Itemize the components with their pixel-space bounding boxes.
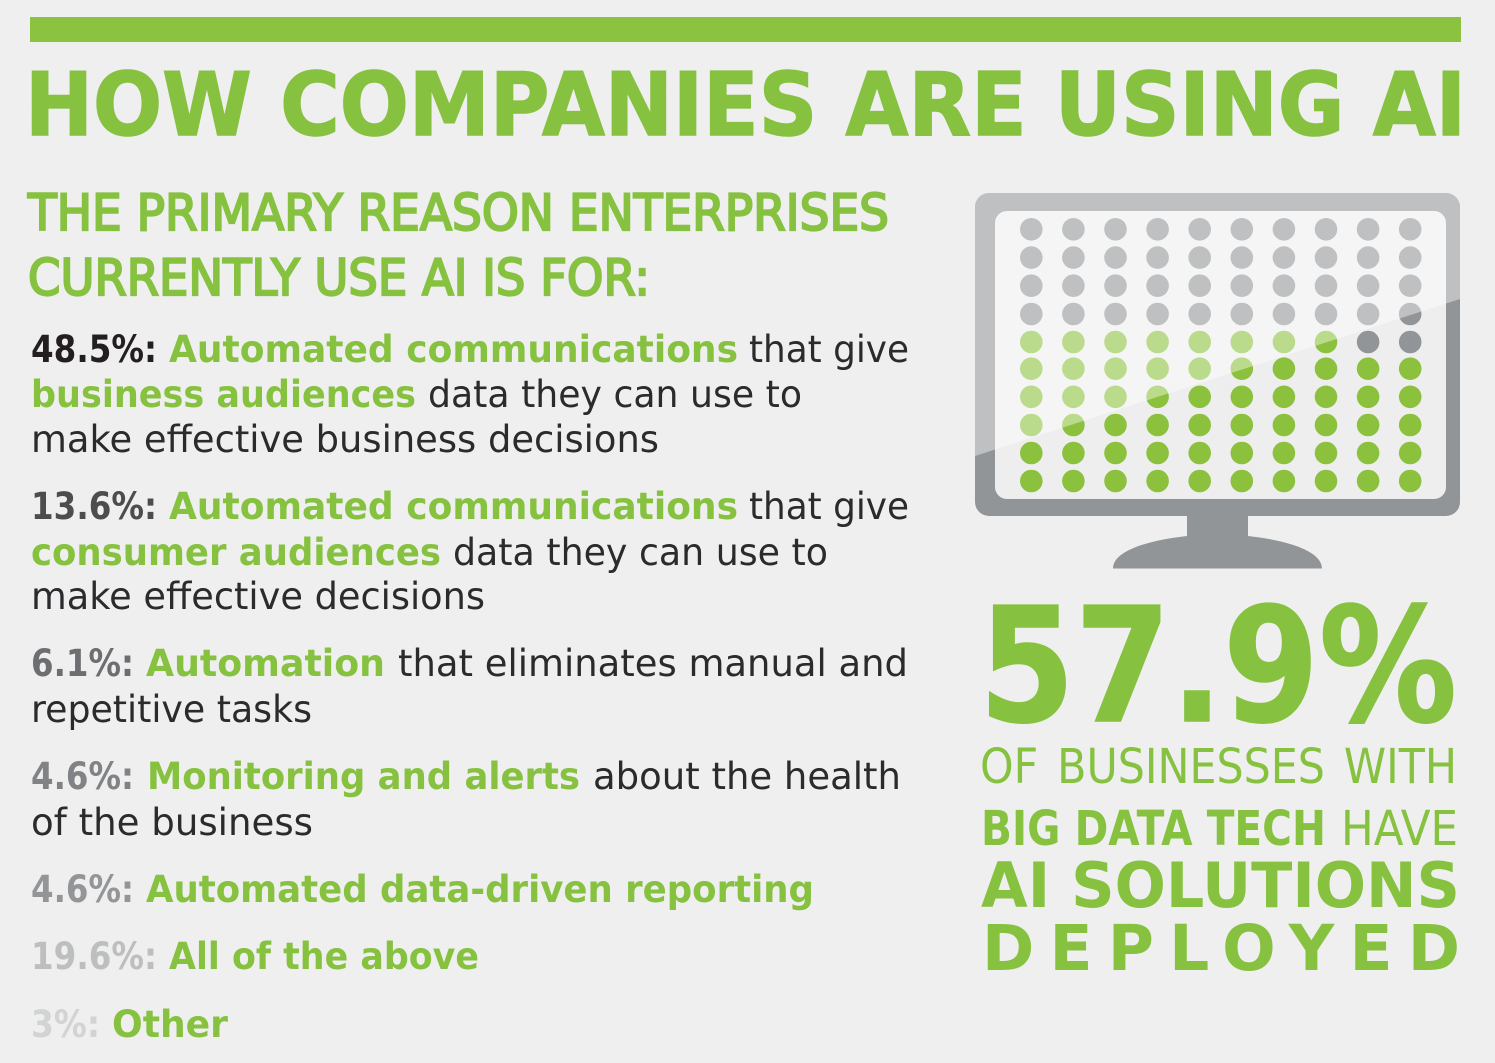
item: 4.6% reporting: Automated data-driven reporting: [146, 867, 814, 911]
item: 19.6%: 19.6%:: [31, 934, 157, 978]
item: 4.6% monitoring: about the health: [593, 754, 901, 798]
dot grid: 57.9%: [1020, 218, 1421, 492]
item: 3%: 3%:: [31, 1002, 100, 1046]
item: 4.6% monitoring: of the business: [31, 800, 313, 844]
monitor frame: [975, 193, 1460, 516]
item: 48.5%: make effective business decisions: [31, 417, 659, 461]
item: 48.5%: Automated communications: [169, 327, 738, 371]
item: 48.5%: data they can use to: [428, 372, 802, 416]
subheading: [27, 184, 889, 307]
item: 13.6%: that give: [749, 484, 909, 528]
subheading: CURRENTLY USE AI IS FOR:: [28, 249, 650, 307]
item: 3%: Other: [112, 1002, 228, 1046]
monitor stand: [1113, 514, 1322, 568]
stat caption: BIG DATA TECH: [981, 801, 1326, 857]
stat caption: DEPLOYED: [982, 912, 1460, 985]
stat list: [31, 327, 909, 1046]
monitor screen: [995, 211, 1446, 499]
item: 13.6%: 13.6%:: [31, 484, 157, 528]
item: 13.6%: make effective decisions: [31, 574, 485, 618]
item: 13.6%: data they can use to: [453, 530, 828, 574]
item: 13.6%: consumer audiences: [31, 530, 441, 574]
screen glare: [975, 193, 1460, 456]
item: 13.6%: [31, 484, 909, 618]
item: 6.1%: 6.1%:: [31, 641, 134, 685]
icon: monitor with dot chart: [975, 193, 1460, 568]
item: 4.6% monitoring: [31, 754, 901, 844]
stat caption: [980, 739, 1460, 985]
top green bar: [30, 17, 1461, 42]
item: 13.6%: Automated communications: [169, 484, 738, 528]
item: 6.1%: repetitive tasks: [31, 687, 312, 731]
item: 6.1%: Automation: [146, 641, 385, 685]
item: 3%: [31, 1002, 228, 1046]
item: 19.6%: [31, 934, 479, 978]
item: 48.5%: 48.5%:: [31, 327, 157, 371]
item: 48.5%: [31, 327, 909, 461]
subheading: THE PRIMARY REASON ENTERPRISES: [27, 184, 889, 242]
stat caption: AI SOLUTIONS: [981, 849, 1460, 922]
item: 4.6% reporting: 4.6%:: [31, 867, 134, 911]
stat caption: HAVE: [1341, 801, 1458, 857]
item: 6.1%: that eliminates manual and: [398, 641, 908, 685]
item: 48.5%: business audiences: [31, 372, 416, 416]
item: 6.1%: [31, 641, 908, 731]
item: 4.6% monitoring: 4.6%:: [31, 754, 134, 798]
item: 4.6% monitoring: Monitoring and alerts: [147, 754, 580, 798]
item: 48.5%: that give: [749, 327, 909, 371]
item: 19.6%: All of the above: [169, 934, 479, 978]
